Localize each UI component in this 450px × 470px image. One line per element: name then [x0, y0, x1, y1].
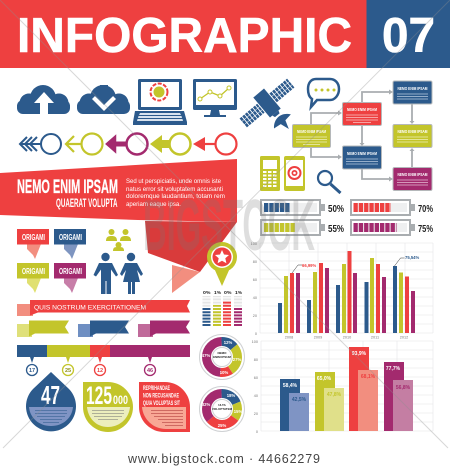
- marker 46: 46: [147, 368, 153, 374]
- donut chart 1: ENIM IPSUM: [213, 355, 231, 359]
- red callout panel: REPRIHANDAE: [143, 385, 170, 392]
- overlapping bar chart: 58,4%: [283, 383, 298, 389]
- banner heading: NEMO ENIM IPSAM: [17, 177, 118, 198]
- battery: 75%: [351, 220, 433, 235]
- battery: 55%: 55%: [328, 224, 344, 235]
- lime stat 125 000: 125: [86, 382, 112, 410]
- overlapping bar chart: 60: [254, 376, 258, 380]
- origami label: red: [17, 229, 49, 259]
- flowchart: [292, 81, 432, 190]
- ribbon heading: QUIS NOSTRUM EXERCITATIONEM: [34, 304, 146, 312]
- drop stat 47: 47: [41, 380, 60, 410]
- icon: group of three people: [106, 229, 131, 251]
- mini bar chart: 0%: [203, 290, 211, 296]
- overlapping bar chart: 47,8%: [327, 392, 342, 398]
- icon: monitor with line chart: [193, 79, 237, 117]
- flow box: blue middle: NEMO ENIM IPSAM: [347, 151, 377, 156]
- flow arrows: [311, 90, 414, 182]
- marker 12: 12: [97, 368, 103, 374]
- battery: 50%: 50%: [328, 204, 344, 215]
- icon: laptop with globe: [133, 79, 187, 125]
- overlapping bar chart: 80: [254, 358, 258, 362]
- banner paragraph: doloremque laudantium, totam rem: [126, 193, 225, 200]
- battery: 70%: [351, 200, 433, 215]
- origami label: blue: ORIGAMI: [59, 233, 82, 242]
- flow box: red: NEMO ENIM IPSAM: [347, 107, 377, 112]
- marker 25: [62, 364, 74, 376]
- callout 66,99%: 66,99%: [302, 263, 316, 268]
- overlapping bar chart: [252, 340, 433, 434]
- column chart: yearly groups: 2008: [285, 336, 293, 340]
- column chart: yearly groups: 0: [255, 332, 257, 336]
- column chart: yearly groups: 80: [253, 260, 257, 264]
- flow box: blue top: NEMO ENIM IPSAM: [398, 86, 428, 91]
- ribbon: blue: [78, 320, 129, 337]
- marker 17: 17: [29, 368, 35, 374]
- column chart: yearly groups: 2010: [343, 336, 351, 340]
- banner subheading: QUAERAT VOLUPTA: [56, 196, 118, 210]
- flow box: purple: NEMO ENIM IPSAM: [398, 172, 428, 177]
- overlapping bar chart: 20: [254, 412, 258, 416]
- footer credit: www.bigstock.com · 44662279: [127, 452, 320, 466]
- overlapping bar chart: 100: [252, 340, 258, 344]
- lime stat 125 000: [83, 382, 133, 432]
- banner paragraph: natus error sit voluptatem accusanti: [126, 186, 223, 193]
- origami label: red: ORIGAMI: [22, 233, 45, 242]
- issue number: 07: [382, 9, 435, 63]
- battery: 75%: 75%: [418, 224, 433, 235]
- header band: [0, 0, 450, 68]
- arrow: blue triple chevron: [20, 134, 61, 154]
- overlapping bar chart: 68,1%: [361, 374, 376, 380]
- red callout panel: QUIA VOLUPTAS SIT: [143, 400, 180, 407]
- donut chart 2: [200, 386, 244, 432]
- red callout panel: NON RECUSANDAE: [143, 392, 179, 400]
- donut chart 2: 18%: [227, 393, 235, 398]
- arrow: lime block: [150, 134, 190, 154]
- donut chart 1: 10%: [220, 370, 228, 375]
- overlapping bar chart: 77,7%: [386, 366, 401, 372]
- column chart: yearly groups: 2011: [371, 336, 379, 340]
- donut chart 2: VOLUPTATEM: [212, 407, 233, 411]
- marker 25: 25: [65, 368, 71, 374]
- donut chart 2: 32%: [202, 402, 210, 407]
- overlapping bar chart: 42,5%: [292, 397, 307, 403]
- battery: 70%: 70%: [418, 204, 433, 215]
- column chart: yearly groups: 2012: [400, 336, 408, 340]
- icon: magnifier: [318, 171, 340, 193]
- donut chart 2: 25%: [218, 423, 226, 428]
- overlapping bar chart: 65,0%: [317, 376, 332, 382]
- icon: keypad phone: [260, 156, 280, 191]
- lime stat 125 000: 000: [113, 393, 128, 407]
- arrow: purple thick: [107, 134, 148, 154]
- icon: map pin with star: [207, 242, 237, 286]
- title: INFOGRAPHIC: [17, 9, 352, 63]
- icon: man and woman: [94, 253, 143, 294]
- red callout panel: [139, 382, 190, 432]
- column chart: yearly groups: 2009: [314, 336, 322, 340]
- donut chart 1: [200, 334, 244, 380]
- origami label: blue: [54, 229, 86, 259]
- flow box: lime right: NEMO ENIM IPSAM: [398, 129, 428, 134]
- column chart: yearly groups: [251, 242, 433, 340]
- flow box: lime left: NEMO ENIM IPSAM: [297, 129, 326, 134]
- mini bar chart: 1%: [235, 290, 243, 296]
- ribbon: purple: [138, 320, 190, 337]
- donut chart 1: NEMO: [218, 351, 227, 355]
- drop stat 47: [26, 372, 76, 431]
- overlapping bar chart: 93,9%: [352, 351, 367, 357]
- ribbon: lime: [17, 320, 69, 337]
- origami label: purple: ORIGAMI: [59, 267, 82, 276]
- marker 17: [26, 364, 38, 376]
- callout 75,54%: 75,54%: [405, 255, 419, 260]
- column chart: yearly groups: 100: [251, 242, 257, 246]
- overlapping bar chart: 0: [256, 430, 258, 434]
- icon: satellite: [235, 73, 313, 149]
- origami label: lime: [17, 263, 49, 293]
- marker 46: [144, 364, 156, 376]
- donut chart 1: 47%: [202, 353, 210, 358]
- overlapping bar chart: 40: [254, 394, 258, 398]
- marker 12: [94, 364, 106, 376]
- battery: 50%: [261, 200, 344, 215]
- segmented proportion bar: [17, 345, 190, 376]
- icon: cloud upload: [17, 85, 70, 115]
- origami label: lime: ORIGAMI: [22, 267, 45, 276]
- banner paragraph: aperiam eaque ipsa.: [126, 201, 181, 208]
- column chart: yearly groups: 20: [253, 314, 257, 318]
- origami label: purple: [54, 263, 86, 293]
- mini bar chart: [203, 290, 243, 326]
- arrow: red: [193, 134, 236, 154]
- banner paragraph: Sed ut perspiciatis, unde omnis iste: [126, 178, 222, 185]
- column chart: yearly groups: 60: [253, 278, 257, 282]
- icon: smartphone with target: [284, 156, 305, 191]
- column chart: yearly groups: 40: [253, 296, 257, 300]
- overlapping bar chart: 56,8%: [396, 385, 411, 391]
- battery: 55%: [261, 220, 344, 235]
- donut chart 2: ULTA: [218, 403, 227, 407]
- mini bar chart: 1%: [214, 290, 222, 296]
- ribbon heading: [17, 300, 190, 316]
- red origami banner: [0, 159, 237, 293]
- arrows row: [20, 134, 236, 154]
- donut chart 1: 27%: [233, 357, 241, 362]
- donut chart 2: 15%: [234, 409, 242, 414]
- mini bar chart: 0%: [224, 290, 232, 296]
- banner paragraph: [126, 178, 225, 208]
- icon: cloud download: [77, 85, 130, 114]
- arrow: lime chevron: [66, 134, 102, 154]
- donut chart 1: 12%: [224, 340, 232, 345]
- icon: speech bubble: [308, 79, 339, 107]
